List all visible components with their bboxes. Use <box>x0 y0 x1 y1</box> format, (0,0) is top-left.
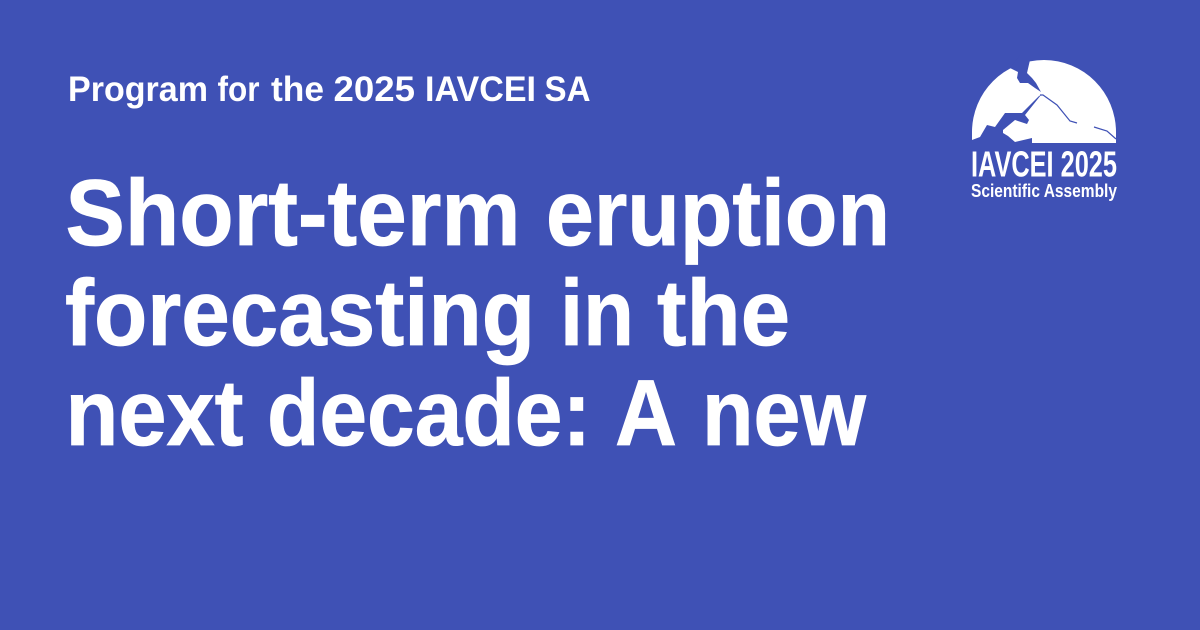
title: new <box>702 360 867 465</box>
eyebrow heading <box>68 70 590 109</box>
title: in <box>560 260 634 365</box>
eyebrow heading: SA <box>544 70 590 109</box>
title: decade: <box>267 360 591 465</box>
title: next <box>66 360 244 465</box>
title <box>65 160 890 465</box>
title: Short-term <box>66 160 520 265</box>
eyebrow heading: for <box>218 70 260 109</box>
eyebrow heading: IAVCEI <box>425 70 536 109</box>
title: forecasting <box>65 260 535 365</box>
eyebrow heading: Program <box>68 70 208 109</box>
logo subtitle: Scientific Assembly <box>971 180 1118 201</box>
title: eruption <box>546 160 890 265</box>
icon: volcano dome <box>972 55 1116 144</box>
logo: IAVCEI 2025 Scientific Assembly <box>971 55 1118 201</box>
eyebrow heading: 2025 <box>334 70 415 109</box>
logo wordmark: IAVCEI 2025 <box>971 144 1117 184</box>
title: A <box>615 360 677 465</box>
title: the <box>657 260 790 365</box>
eyebrow heading: the <box>271 70 324 109</box>
